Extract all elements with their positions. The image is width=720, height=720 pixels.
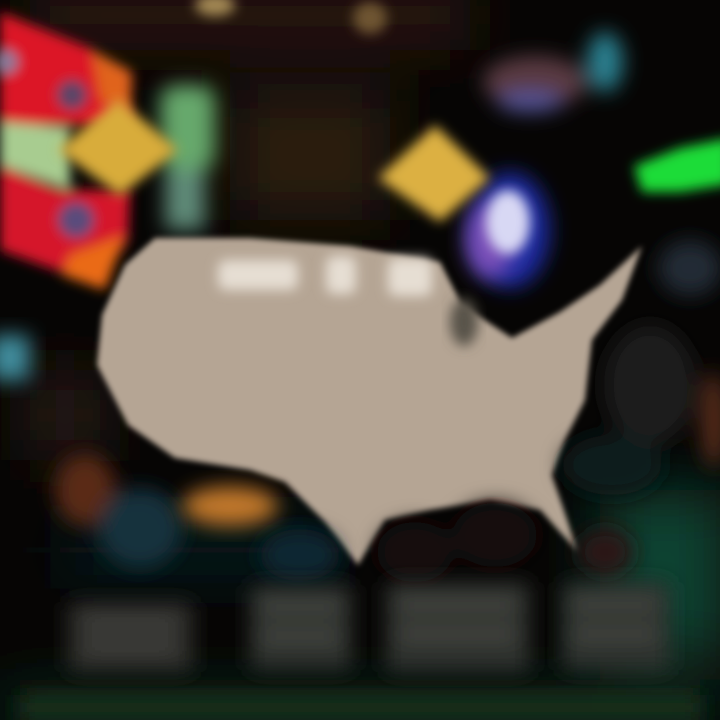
sign: green vertical left — [160, 85, 215, 230]
left side figures — [55, 454, 340, 581]
dark crowd silhouettes at map base — [377, 503, 633, 582]
stat card 3 — [386, 582, 530, 672]
stat card 1 — [68, 602, 193, 672]
sign: blue purple glow — [466, 172, 550, 288]
stat card 4 — [562, 582, 670, 670]
small teal sign left — [0, 335, 30, 380]
sign: upper right neon — [483, 32, 623, 112]
panel: red sign on left — [0, 12, 132, 290]
right side dark figures — [562, 240, 720, 495]
ceiling lamps — [195, 0, 387, 34]
footer band — [20, 695, 700, 720]
sign: bright green neon — [634, 138, 720, 192]
sign: yellow diamond left — [58, 98, 178, 196]
map marker: dark pin near top right — [450, 298, 478, 346]
map: United States silhouette — [97, 238, 642, 565]
map heading: blurred white text — [218, 256, 432, 296]
orange accent — [182, 486, 278, 526]
stat card 2 — [250, 585, 352, 670]
sign: yellow diamond centre — [378, 125, 490, 222]
